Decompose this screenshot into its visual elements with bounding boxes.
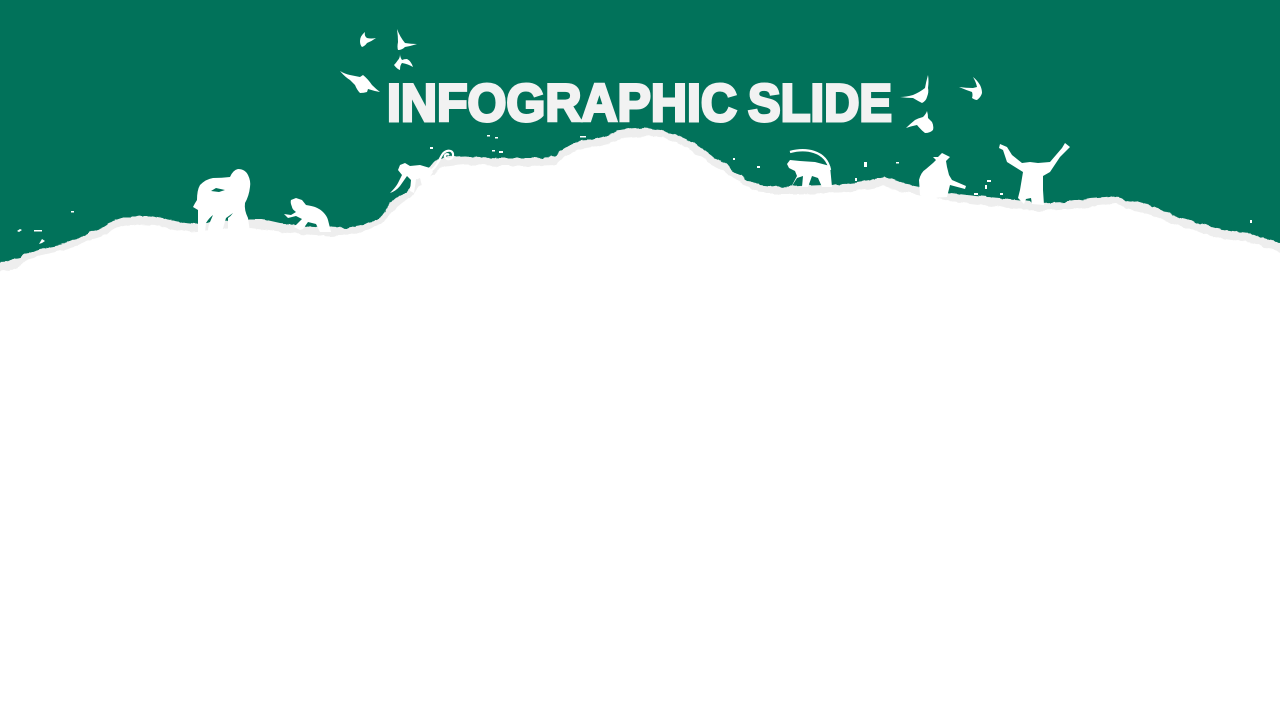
birds: left flock bbox=[340, 29, 417, 93]
title: INFOGRAPHIC bbox=[387, 74, 737, 133]
torn edge flecks bbox=[17, 135, 1252, 244]
animal: walking monkey bbox=[787, 150, 832, 189]
birds: right flock bbox=[900, 75, 982, 133]
animal: crouching monkey bbox=[284, 198, 331, 232]
title: SLIDE bbox=[748, 74, 892, 133]
torn paper grey edge bbox=[0, 128, 1280, 300]
animal: gorilla bbox=[193, 169, 250, 232]
animal: climbing monkey bbox=[390, 151, 453, 193]
green header background bbox=[0, 0, 1280, 290]
animal: sitting lemur bbox=[919, 153, 966, 198]
animal: orangutan arms raised bbox=[999, 143, 1070, 205]
